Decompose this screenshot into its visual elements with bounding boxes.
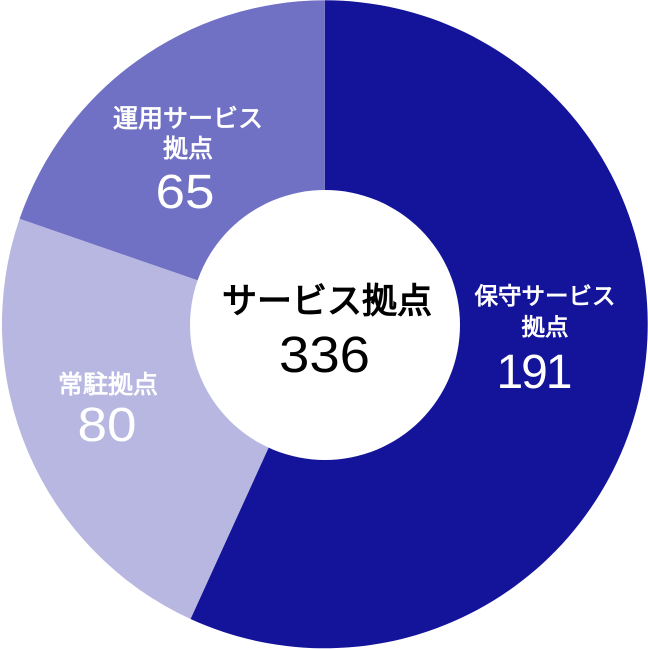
label: resident locations 80: 常駐拠点	[58, 371, 158, 399]
center total label	[222, 282, 432, 383]
label: operation services 65: 65	[156, 166, 214, 219]
label: operation services 65	[113, 105, 263, 219]
label: operation services 65: 運用サービス	[113, 105, 263, 133]
label: resident locations 80	[58, 371, 158, 452]
label: maintenance services 191: 191	[496, 346, 572, 399]
label: maintenance services 191: 保守サービス	[474, 283, 616, 309]
center total label: 336	[279, 326, 370, 383]
label: maintenance services 191: 拠点	[522, 314, 568, 340]
segment: operation service locations 65	[20, 0, 325, 324]
label: resident locations 80: 80	[78, 399, 136, 452]
label: operation services 65: 拠点	[163, 135, 213, 163]
label: maintenance services 191	[474, 283, 616, 399]
segment: resident locations 80	[2, 219, 325, 619]
center hole	[190, 190, 460, 460]
center total label: サービス拠点	[222, 282, 432, 321]
segment: maintenance service locations 191	[190, 0, 648, 648]
